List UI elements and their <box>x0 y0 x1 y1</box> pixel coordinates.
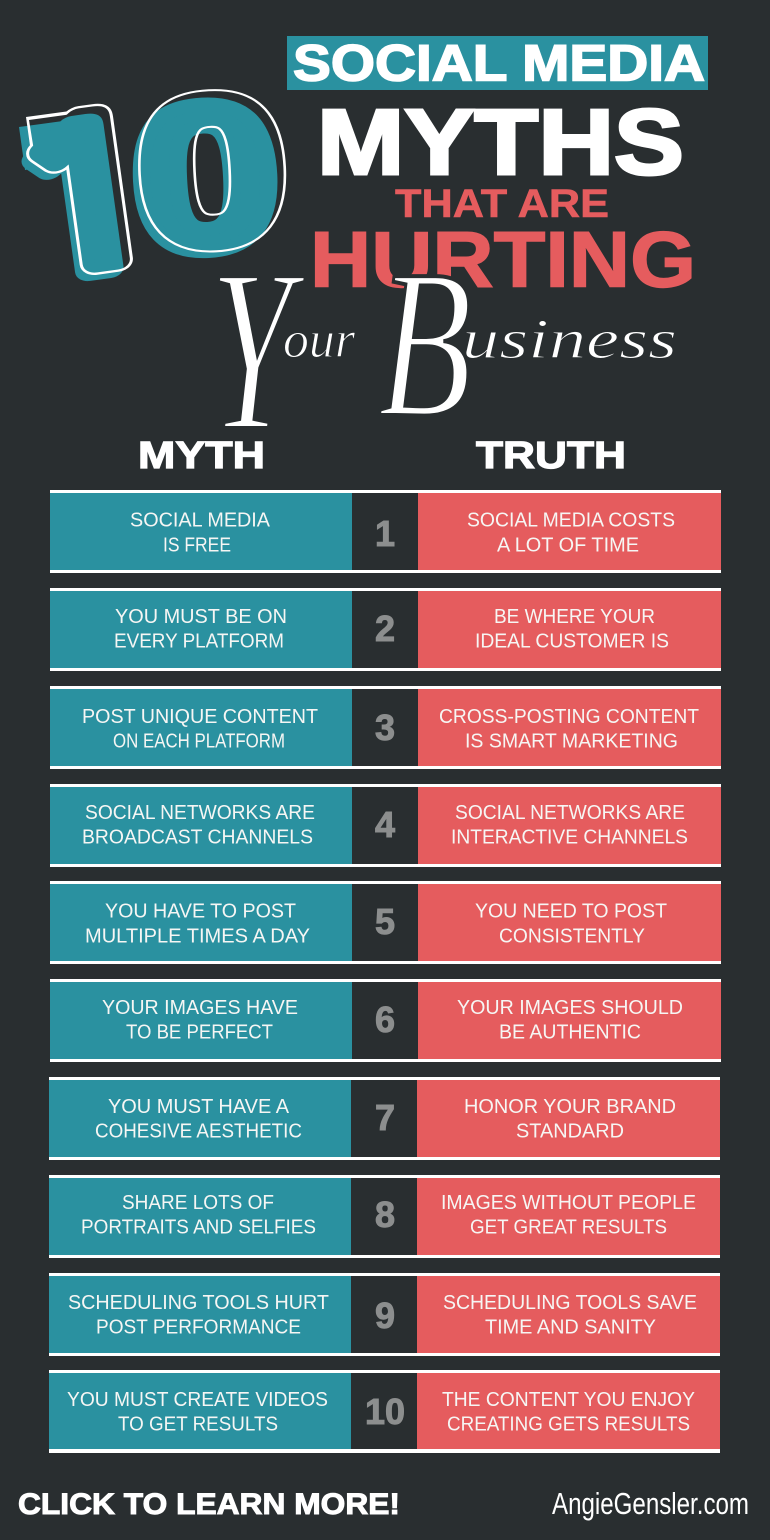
row 4: INTERACTIVE CHANNELS <box>451 826 688 848</box>
row 6: TO BE PERFECT <box>126 1022 273 1044</box>
row 3 <box>50 686 721 769</box>
row 9 <box>49 1273 720 1356</box>
row 9: 9 <box>375 1295 395 1336</box>
big number 10 <box>19 89 286 282</box>
row 4 <box>50 784 721 867</box>
row 8: SHARE LOTS OF <box>122 1192 274 1214</box>
row 5: MULTIPLE TIMES A DAY <box>85 926 310 948</box>
row 3: CROSS-POSTING CONTENT <box>439 706 699 728</box>
row 7: YOU MUST HAVE A <box>108 1096 290 1118</box>
row 9: SCHEDULING TOOLS HURT <box>68 1292 329 1314</box>
row 4: 4 <box>375 804 395 845</box>
row 8: 8 <box>375 1194 395 1235</box>
row 10: 10 <box>365 1391 405 1432</box>
row 9: TIME AND SANITY <box>485 1316 656 1338</box>
big number 10: 0 <box>125 58 285 297</box>
column heading: myth: MYTH <box>138 435 265 477</box>
row 5 <box>50 881 721 964</box>
row 2 <box>50 588 721 671</box>
heading: hurting: HURTING <box>310 214 696 304</box>
row 9: POST PERFORMANCE <box>96 1316 301 1338</box>
row 3: POST UNIQUE CONTENT <box>82 706 318 728</box>
row 1 <box>50 490 721 573</box>
row 10: CREATING GETS RESULTS <box>447 1414 690 1436</box>
row 2: 2 <box>375 608 395 649</box>
row 5: YOU HAVE TO POST <box>105 900 296 922</box>
row 3: 3 <box>375 707 395 748</box>
row 2: EVERY PLATFORM <box>114 630 284 652</box>
row 4: SOCIAL NETWORKS ARE <box>455 802 685 824</box>
script heading: your business: B <box>378 226 472 461</box>
row 8 <box>49 1175 720 1258</box>
row 6 <box>50 979 721 1062</box>
row 8: PORTRAITS AND SELFIES <box>81 1216 316 1238</box>
row 7: 7 <box>375 1097 395 1138</box>
row 9: SCHEDULING TOOLS SAVE <box>443 1292 697 1314</box>
row 5: CONSISTENTLY <box>499 926 645 948</box>
row 10: THE CONTENT YOU ENJOY <box>442 1389 695 1411</box>
row 4: BROADCAST CHANNELS <box>82 826 313 848</box>
row 1: IS FREE <box>163 534 231 556</box>
row 2: BE WHERE YOUR <box>494 606 655 628</box>
row 6: YOUR IMAGES HAVE <box>102 997 298 1019</box>
row 5: 5 <box>375 901 395 942</box>
row 1: SOCIAL MEDIA <box>130 510 271 532</box>
script heading: your business: our <box>283 312 356 369</box>
row 6: BE AUTHENTIC <box>499 1022 641 1044</box>
row 10 <box>49 1370 720 1453</box>
row 1: A LOT OF TIME <box>497 534 639 556</box>
script heading: your business <box>210 222 677 479</box>
footer call to action: CLICK TO LEARN MORE! <box>18 1488 400 1521</box>
row 6: YOUR IMAGES SHOULD <box>457 997 683 1019</box>
heading: myths: MYTHS <box>317 90 684 194</box>
heading: that are: THAT ARE <box>395 182 609 226</box>
row 10: TO GET RESULTS <box>118 1414 278 1436</box>
row 1: 1 <box>375 513 395 554</box>
heading: social media banner: SOCIAL MEDIA <box>293 34 705 92</box>
row 8: IMAGES WITHOUT PEOPLE <box>441 1192 696 1214</box>
row 8: GET GREAT RESULTS <box>470 1216 667 1238</box>
script heading: your business: Y <box>210 222 305 479</box>
row 3: ON EACH PLATFORM <box>113 730 285 752</box>
row 6: 6 <box>375 999 395 1040</box>
row 7: COHESIVE AESTHETIC <box>95 1120 302 1142</box>
script heading: your business: usiness <box>462 309 677 371</box>
row 1: SOCIAL MEDIA COSTS <box>467 510 675 532</box>
row 3: IS SMART MARKETING <box>465 730 678 752</box>
row 7: HONOR YOUR BRAND <box>464 1096 676 1118</box>
column heading: truth: TRUTH <box>476 435 626 477</box>
row 7 <box>49 1077 720 1160</box>
row 7: STANDARD <box>516 1120 624 1142</box>
row 4: SOCIAL NETWORKS ARE <box>85 802 315 824</box>
row 2: IDEAL CUSTOMER IS <box>475 630 669 652</box>
row 2: YOU MUST BE ON <box>115 606 287 628</box>
row 5: YOU NEED TO POST <box>475 900 667 922</box>
row 10: YOU MUST CREATE VIDEOS <box>67 1389 328 1411</box>
